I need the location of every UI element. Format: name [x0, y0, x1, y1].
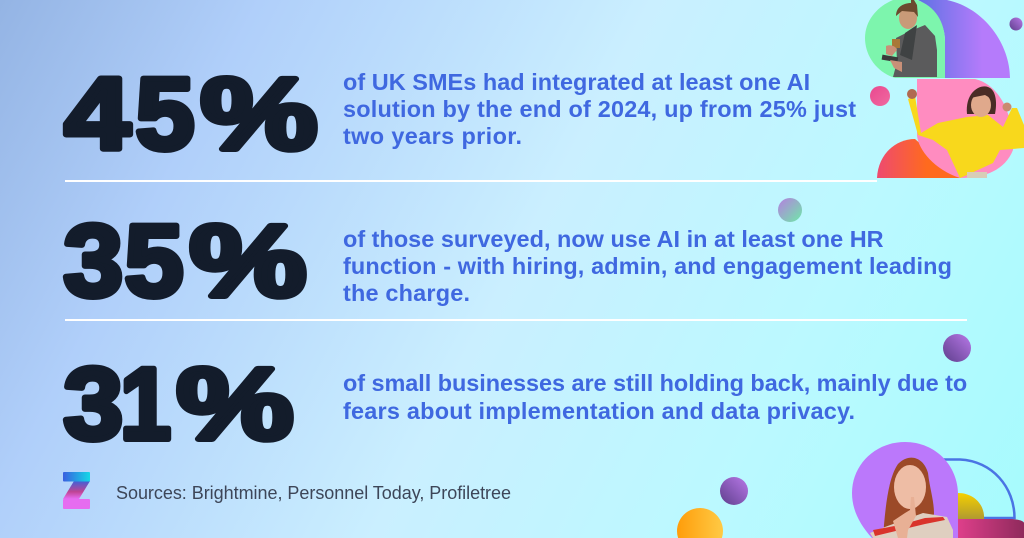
- stat number: 45%: %: [200, 56, 317, 171]
- stat text: 31%: of small businesses are still holding back, mainly due to: [343, 370, 967, 396]
- stat text: 35%: function - with hiring, admin, and engagement leading: [343, 253, 952, 279]
- stat text: 45%: [343, 69, 856, 149]
- illustration: woman thinking: [852, 442, 1024, 538]
- stat number: 31%: [64, 346, 293, 461]
- stat text: 31%: fears about implementation and data privacy.: [343, 398, 855, 424]
- stat number: 31%: 1: [120, 346, 171, 461]
- stat number: 31%: %: [176, 346, 293, 461]
- sources: Sources: Brightmine, Personnel Today, Profiletree: [116, 483, 511, 503]
- stat text: 35%: [343, 226, 952, 306]
- stat number: 35%: %: [190, 203, 306, 318]
- stat number: 35%: 3: [64, 204, 123, 318]
- illustration: woman in yellow sweater: [877, 79, 1024, 178]
- stat number: 45%: 4: [64, 58, 130, 171]
- stat number: 45%: [64, 56, 317, 172]
- stat text: 45%: of UK SMEs had integrated at least one AI: [343, 69, 810, 95]
- stat text: 35%: of those surveyed, now use AI in at least one HR: [343, 226, 884, 252]
- divider: [65, 180, 877, 182]
- stat number: 31%: 3: [64, 347, 123, 461]
- logo: [63, 472, 90, 509]
- stat number: 35%: 5: [124, 205, 183, 319]
- stat text: 45%: solution by the end of 2024, up from 25% just: [343, 96, 856, 122]
- stat number: 35%: [64, 203, 306, 319]
- divider: [65, 319, 967, 321]
- decorative dots: [677, 18, 1022, 538]
- illustration: man with phone: [865, 0, 1010, 78]
- stat text: 35%: the charge.: [343, 280, 470, 306]
- stat text: 45%: two years prior.: [343, 123, 522, 149]
- stat number: 45%: 5: [136, 58, 194, 172]
- stat text: 31%: [343, 370, 967, 424]
